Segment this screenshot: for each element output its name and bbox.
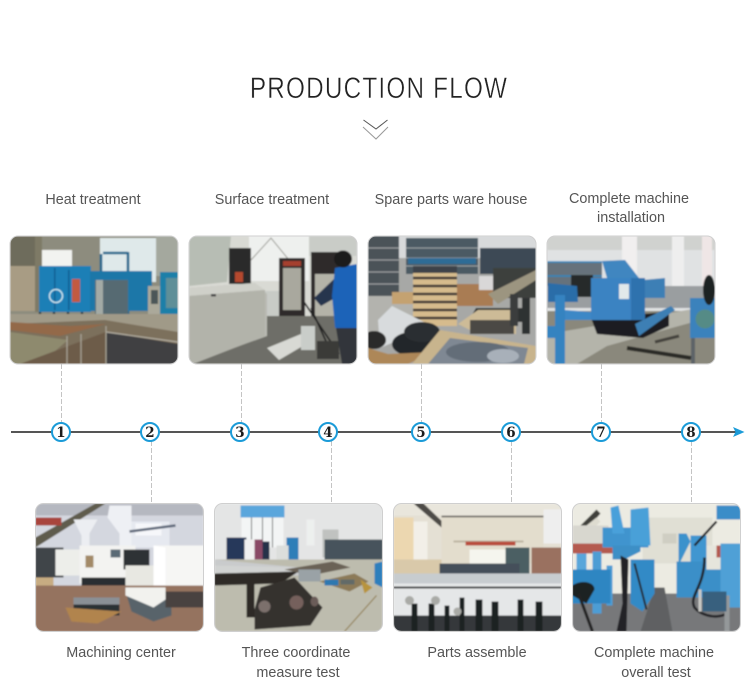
step marker 1: 1: [56, 425, 66, 441]
label: three coordinate measure test: Three coordinate: [242, 645, 350, 661]
label: complete machine installation: Complete machine: [569, 191, 689, 207]
photo: complete machine installation: [547, 236, 715, 364]
label: complete machine overall test: Complete machine: [594, 645, 714, 661]
photo: heat treatment: [10, 236, 178, 364]
photo: parts assemble: [394, 504, 562, 632]
step marker 6: [502, 423, 520, 441]
label: spare parts ware house: Spare parts ware house: [375, 192, 527, 208]
label: parts assemble: Parts assemble: [427, 645, 527, 661]
dashed connectors: [62, 364, 692, 503]
step marker 7: 7: [596, 425, 606, 441]
label: heat treatment: Heat treatment: [45, 192, 141, 208]
step marker 7: [592, 423, 610, 441]
photo: spare parts warehouse: [362, 236, 536, 364]
title: PRODUCTION FLOW: [250, 71, 508, 105]
step marker 2: [141, 423, 159, 441]
photo: machining center: [36, 504, 204, 632]
step marker 3: 3: [235, 425, 245, 441]
icon: arrow head: [733, 427, 744, 437]
icon: double chevron: [363, 120, 388, 139]
step marker 1: [52, 423, 70, 441]
label: surface treatment: Surface treatment: [215, 192, 329, 208]
photo: three coordinate measure test: [214, 504, 382, 632]
step marker 8: 8: [686, 425, 696, 441]
timeline axis: [11, 427, 744, 437]
label: machining center: Machining center: [66, 645, 176, 661]
step marker 6: 6: [506, 425, 516, 441]
photo: complete machine overall test: [572, 504, 740, 632]
step marker 5: [412, 423, 430, 441]
label: complete machine installation: installation: [597, 210, 665, 226]
label: three coordinate measure test: measure test: [256, 665, 340, 681]
step marker 8: [682, 423, 700, 441]
step marker 5: 5: [416, 425, 426, 441]
photo: surface treatment: [189, 236, 357, 364]
label: complete machine overall test: overall test: [621, 665, 691, 681]
step marker 3: [231, 423, 249, 441]
step marker 2: 2: [145, 425, 155, 441]
step marker 4: 4: [323, 425, 333, 441]
step marker 4: [319, 423, 337, 441]
